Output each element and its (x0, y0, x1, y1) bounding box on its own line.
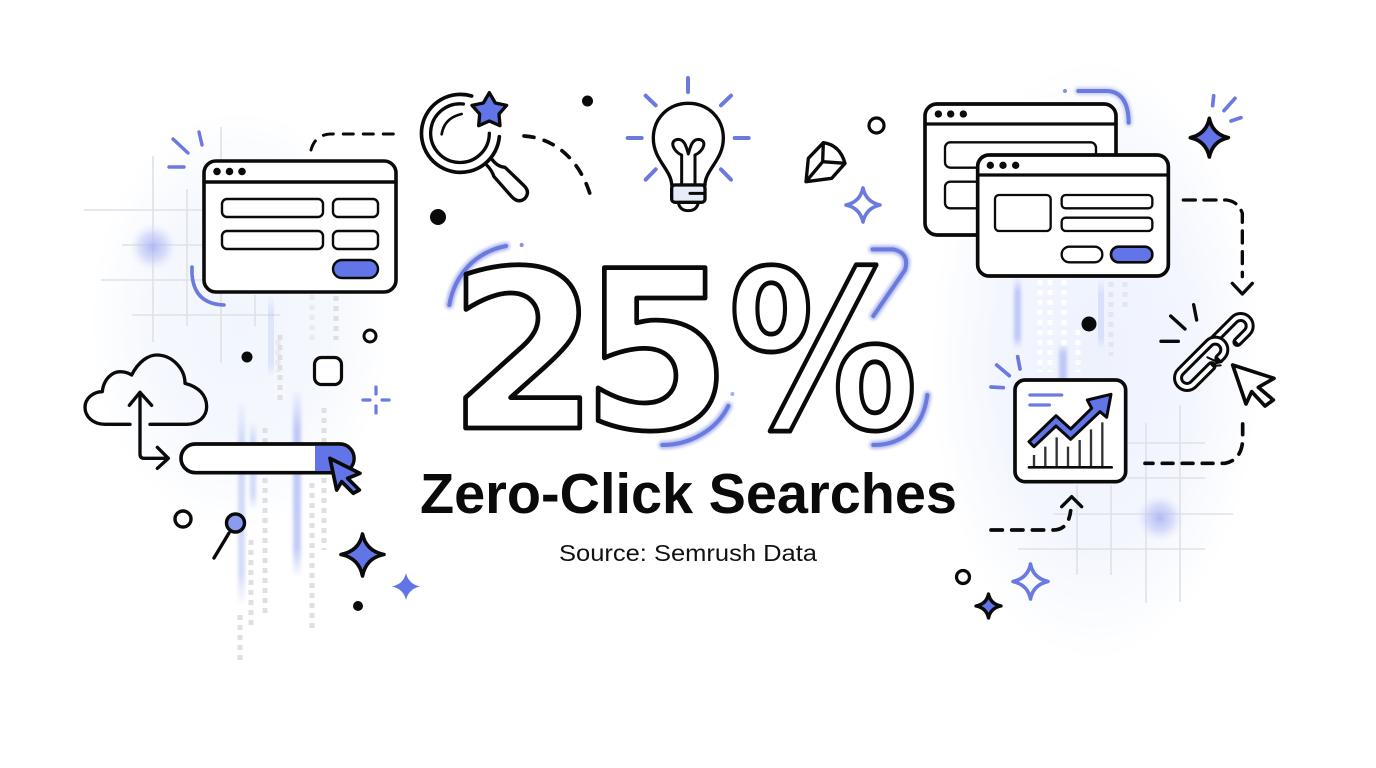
sparkle blue (392, 573, 420, 600)
icon: star (472, 93, 507, 126)
dashed arrow into chart (991, 497, 1082, 530)
dashed arrow, windows to link (1183, 200, 1242, 277)
dot left (242, 352, 252, 362)
left grid with glow (84, 127, 280, 363)
dashed connector, form to magnifier (311, 134, 398, 150)
dashed connector, chart to link (1145, 424, 1243, 463)
sparkle black lower right (976, 594, 1001, 618)
arrow head (1232, 283, 1252, 294)
ring lower right (956, 570, 970, 584)
dot lower left (353, 601, 363, 611)
dashed plus sparkle (363, 387, 389, 413)
decorative ring left (364, 330, 376, 342)
form fields (222, 199, 378, 249)
blue button (333, 260, 378, 278)
icon: broken chain link with cursor (1161, 305, 1274, 406)
back window (925, 104, 1116, 235)
sparkle black (341, 534, 384, 576)
progress bar with cursor (181, 444, 360, 493)
rounded square (314, 358, 342, 384)
legend lines (1030, 387, 1062, 403)
dot top (582, 96, 593, 106)
ring top centre (869, 118, 884, 133)
heading: Zero-Click Searches (420, 462, 957, 526)
accent arc (192, 267, 224, 305)
sparks (991, 357, 1020, 388)
dashed connector, magnifier curve (524, 136, 592, 200)
sparkle outline top (846, 188, 880, 222)
icon: cloud upload (85, 355, 207, 468)
sparkle outline lower right (1013, 564, 1048, 599)
icon: magnifier with star (421, 93, 527, 201)
icon: gem (806, 143, 845, 182)
icon: pin (214, 514, 244, 558)
form window, left (169, 132, 396, 305)
sparks (169, 132, 202, 167)
right data columns (1014, 278, 1125, 385)
right grid with glow (1018, 405, 1233, 603)
big number 25%: 5 (582, 225, 732, 481)
stacked windows, right (925, 89, 1168, 276)
background: soft right glow (930, 60, 1260, 660)
background: soft left glow (90, 110, 390, 530)
accent arcs around the number (449, 243, 927, 445)
ring lower left (175, 511, 191, 527)
icon: light bulb (628, 78, 749, 211)
trend arrow (1029, 394, 1111, 447)
bars (1034, 422, 1102, 467)
left data columns (238, 295, 336, 660)
dot under magnifier (430, 209, 446, 225)
sparkle black with sparks, top right (1190, 96, 1241, 157)
big number 25%: % (728, 225, 918, 481)
front window (978, 155, 1168, 276)
dot right (1082, 316, 1096, 332)
window frame (204, 161, 396, 292)
big number 25% (448, 225, 918, 481)
source note: Source: Semrush Data (559, 540, 817, 566)
chart card (991, 357, 1126, 482)
big number 25%: 2 (448, 225, 599, 481)
accent arc (1078, 91, 1129, 123)
icon: cursor (330, 458, 360, 493)
